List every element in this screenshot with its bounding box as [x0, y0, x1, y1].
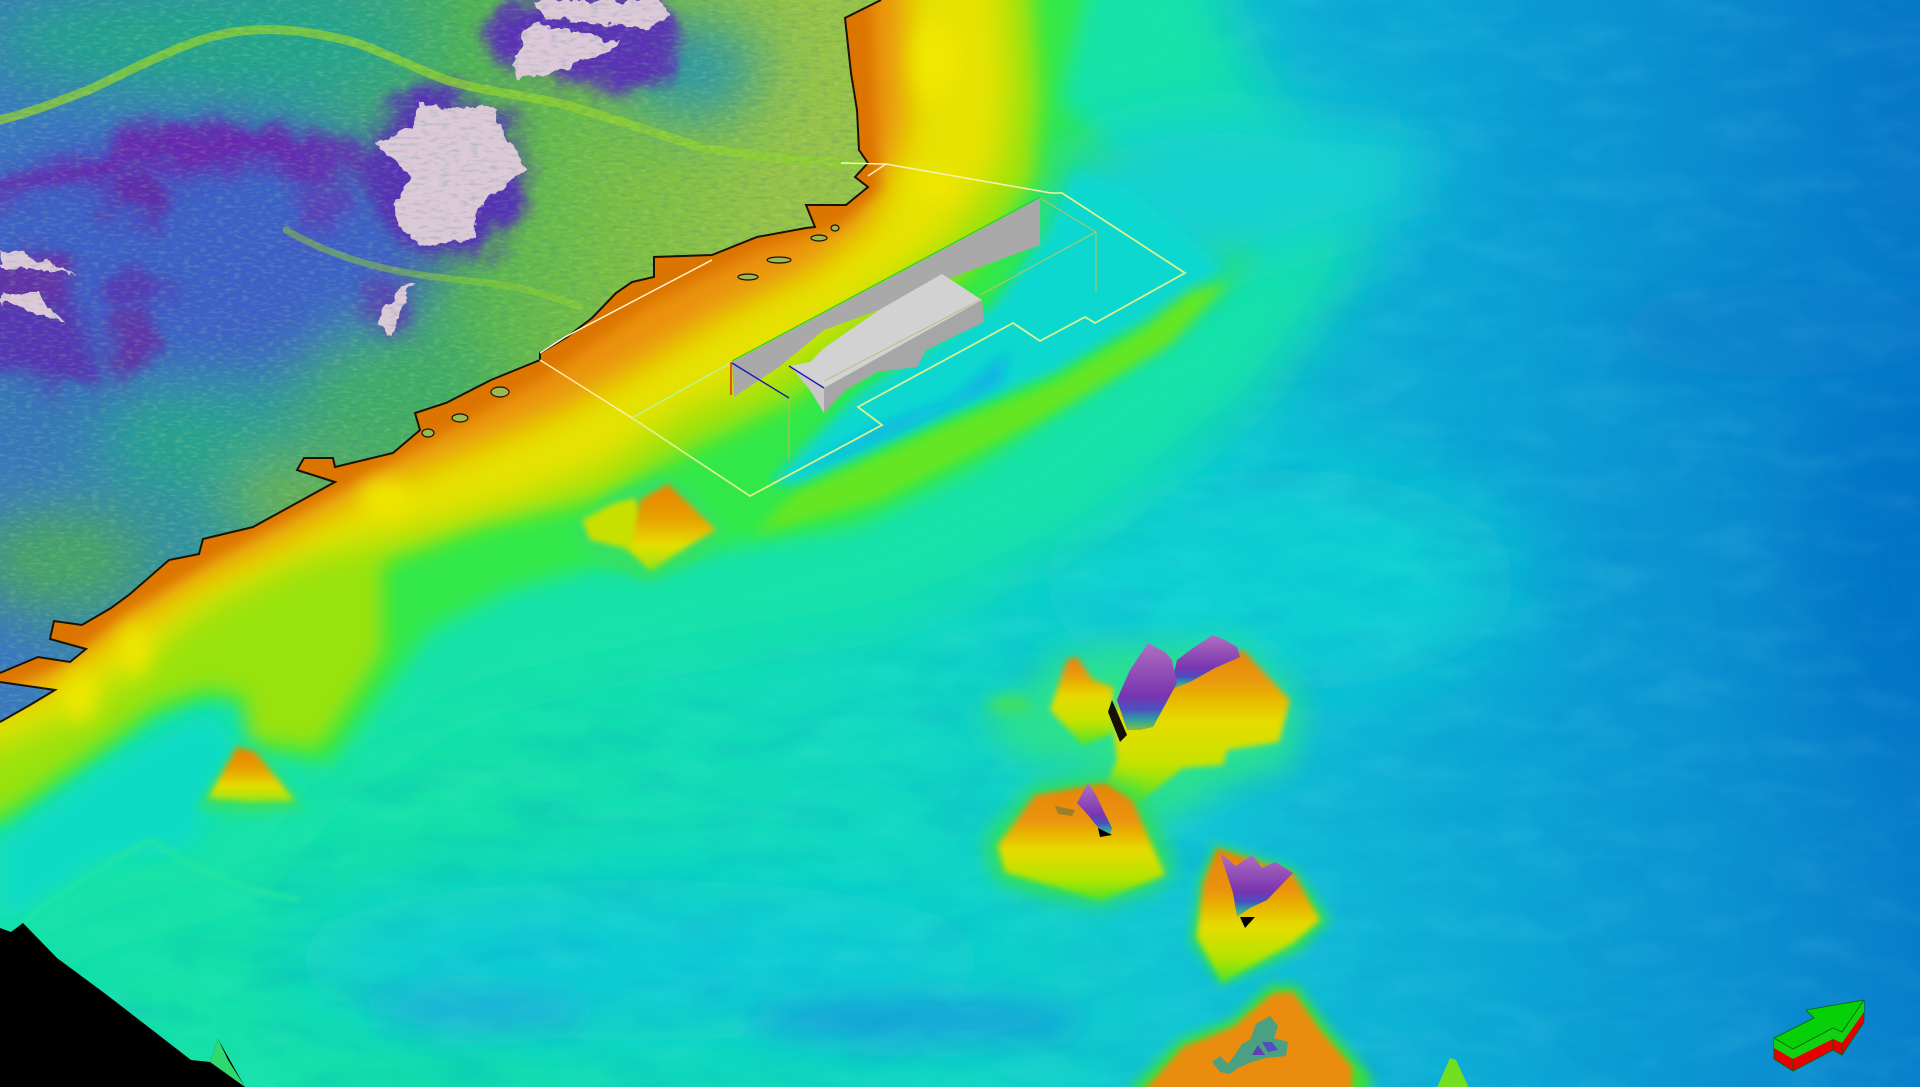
river valleys [0, 30, 880, 307]
deep trench highlight [790, 350, 1010, 478]
bright shelf highlights [64, 20, 959, 722]
outer ridge [755, 282, 1228, 535]
seamount: near shelf [570, 475, 725, 582]
cyan trench soft upper area [1040, 110, 1420, 330]
lime shelf band [0, 0, 1040, 822]
seamount: small yellow [195, 745, 305, 815]
black no-data corner [0, 923, 245, 1087]
teal-green continental slope [0, 0, 1370, 1000]
land area with relief colours [0, 0, 900, 730]
purple highlands [0, 0, 685, 390]
deep orange coastal band [0, 0, 880, 715]
cyan patch under the slope [0, 712, 245, 920]
deep-water terrace edge [23, 840, 300, 923]
cyan trench [770, 170, 1225, 487]
grey back structure [732, 198, 1040, 397]
orange shelf band [0, 0, 905, 725]
seamount: bottom edge [1125, 985, 1370, 1087]
seamount cluster [975, 635, 1305, 825]
coastline shadow [0, 0, 881, 722]
grey front structure [790, 274, 984, 413]
land texture [0, 0, 900, 730]
green slope band [0, 0, 1260, 830]
yellow shelf band [0, 0, 1010, 770]
small green spur [210, 1039, 245, 1087]
north arrow [1774, 1000, 1864, 1071]
seamount: flat-topped [985, 775, 1175, 906]
teal and blue lowlands [0, 0, 760, 610]
axis lines [731, 197, 1040, 398]
seamount: jagged peak [1190, 845, 1330, 985]
survey area outline [540, 163, 1185, 496]
nearshore islands [422, 225, 839, 437]
pale summits [0, 0, 670, 337]
seamount: tiny bottom peak [1436, 1058, 1470, 1087]
